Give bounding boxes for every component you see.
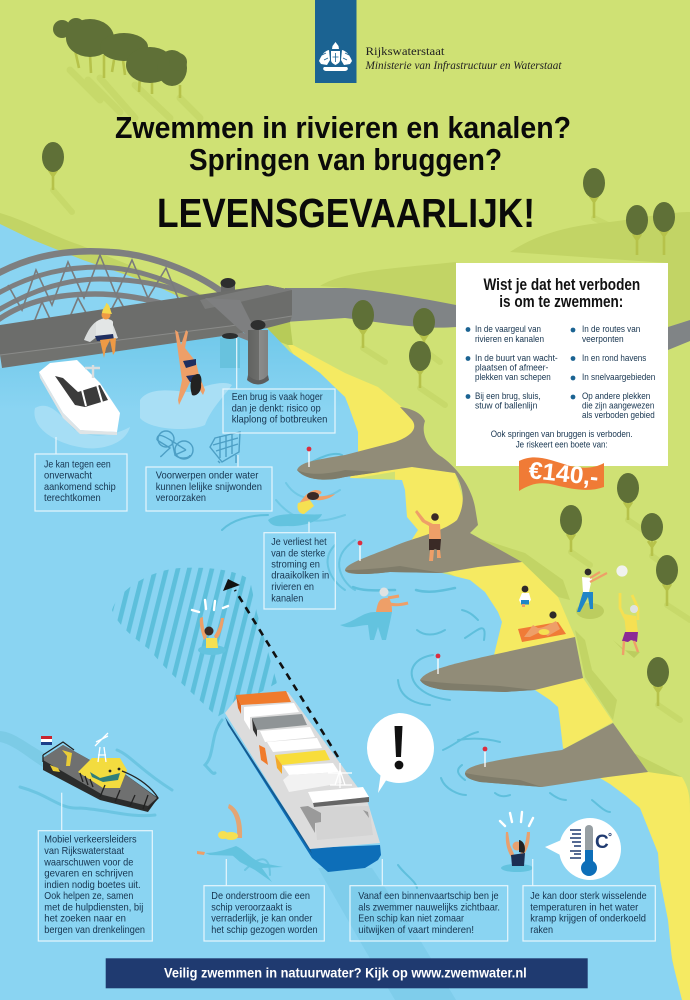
bottom banner [106, 958, 588, 988]
label: undercurrent: schip veroorzaakt is [211, 902, 292, 913]
bullet dots [466, 327, 575, 399]
right list: In en rond havens [582, 353, 647, 363]
degree: ° [608, 832, 612, 843]
deck [0, 285, 292, 355]
left list: rivieren en kanalen [475, 334, 544, 344]
cabin [78, 758, 127, 788]
label: current: stroming en [271, 559, 320, 570]
patrol boat [41, 733, 158, 812]
speedboat wake [34, 406, 130, 448]
fine flag: €140,- [527, 457, 600, 491]
label: undercurrent: De onderstroom die een [211, 891, 310, 902]
speech bubble: thermometer [545, 818, 621, 880]
right list [582, 324, 655, 420]
label: current: van de sterke [271, 548, 326, 559]
label: visibility: uitwijken of vaart minderen! [358, 925, 474, 936]
right list: veerponten [582, 334, 624, 344]
label: undercurrent [204, 859, 324, 941]
label: bridge height: klaplong of botbreuken [232, 415, 327, 426]
label: objects under water: Voorwerpen onder water [156, 471, 259, 482]
road right of panel [668, 320, 690, 350]
truss [8, 255, 190, 345]
deck front beam [0, 316, 292, 368]
water [0, 224, 682, 1000]
dashed course arrow [223, 579, 338, 757]
left list: Bij een brug, sluis, [475, 391, 541, 401]
bridge [0, 251, 292, 384]
label: bridge height: dan je denkt: risico op [232, 403, 321, 414]
left list: plaatsen of afmeer- [475, 363, 548, 373]
label: temperature: Je kan door sterk wisselende [530, 891, 647, 902]
logo: Rijkswaterstaat [315, 0, 562, 83]
mast [328, 763, 352, 788]
submerged shopping cart [210, 432, 240, 463]
tree cluster top-left [53, 18, 200, 118]
label: current: kanalen [271, 593, 303, 604]
fine note: Je riskeert een boete van: [516, 440, 608, 450]
older swimmer [340, 588, 408, 640]
label: current: draaikolken in [271, 571, 329, 582]
left list: plekken van schepen [475, 372, 551, 382]
groyne undersides [297, 470, 542, 787]
panel heading: Wist je dat het verboden [484, 275, 640, 294]
groynes [297, 407, 648, 787]
title [115, 110, 571, 236]
distressed swimmer [192, 600, 228, 655]
panel: prohibited [456, 263, 668, 466]
underwater-pulled swimmer [197, 804, 283, 882]
label: temperature: kramp krijgen of onderkoeld [530, 914, 646, 925]
thermometer [581, 825, 597, 876]
water under bridge shade [0, 328, 350, 410]
title: LEVENSGEVAARLIJK! [157, 190, 535, 236]
right list: In de routes van [582, 324, 640, 334]
right list: In snelvaargebieden [582, 372, 655, 382]
label: boat: Je kan tegen een [44, 460, 111, 470]
label: boat: onverwacht [44, 471, 92, 482]
label: bridge height [223, 338, 335, 433]
label: traffic controllers [38, 793, 152, 941]
ship wake [318, 868, 456, 1000]
radar mast [95, 733, 108, 762]
deck [43, 745, 157, 806]
panel heading [484, 275, 640, 311]
deck top road [200, 285, 292, 309]
older player [613, 593, 640, 658]
far arches [0, 251, 254, 340]
label: objects under water [146, 455, 272, 511]
left list: In de buurt van wacht- [475, 353, 558, 363]
label: visibility: Vanaf een binnenvaartschip ben je [358, 891, 499, 902]
pier back cap [221, 283, 235, 296]
label: current [264, 522, 335, 609]
title: Springen van bruggen? [189, 142, 502, 177]
blue hull [225, 720, 381, 872]
flag [41, 736, 52, 745]
right list: als verboden gebied [582, 410, 655, 420]
submerged bicycle [157, 431, 193, 459]
road on land [285, 288, 456, 328]
label: traffic controllers: waarschuwen voor de [43, 857, 134, 868]
title: Zwemmen in rivieren en kanalen? [115, 110, 571, 145]
ripples [20, 454, 610, 888]
label: objects under water: veroorzaken [156, 493, 206, 504]
label: traffic controllers: Ook helpen ze, samen [44, 891, 133, 902]
panel heading: is om te zwemmen: [499, 292, 623, 311]
bottom banner: Veilig zwemmen in natuurwater? Kijk op www.zwemwater.nl [164, 964, 527, 980]
label: undercurrent: verraderlijk, je kan onder [211, 914, 313, 925]
hull [43, 745, 158, 812]
label: bridge height: Een brug is vaak hoger [232, 392, 323, 403]
sunbather on towel [518, 611, 566, 642]
beach man [415, 510, 441, 561]
label: boat [35, 437, 127, 511]
label: visibility: Een schip kan niet zomaar [358, 914, 465, 925]
speech bubble: warning [367, 713, 434, 793]
label: traffic controllers: het zoeken naar en [44, 914, 126, 925]
person sitting on bridge [84, 303, 118, 358]
man with ball [576, 565, 628, 619]
label: objects under water: kunnen lelijke snijwonden [156, 482, 262, 493]
label: temperature [523, 859, 655, 941]
label: visibility [350, 859, 508, 941]
superstructure [308, 787, 369, 803]
left list [475, 324, 558, 411]
fine note [491, 429, 633, 450]
beaches [288, 345, 690, 1000]
right list: die zijn aangewezen [582, 401, 654, 411]
label: current: rivieren en [271, 582, 314, 593]
celsius: C [595, 832, 609, 853]
scale ticks [570, 830, 581, 858]
patrol boat wake [0, 731, 48, 770]
containers [236, 691, 291, 705]
label: visibility: als zwemmer nauwelijks zichtbaar. [358, 902, 500, 913]
label: temperature: raken [530, 925, 553, 936]
ministry name: Rijkswaterstaat [366, 44, 445, 58]
black cap [220, 278, 236, 288]
label: traffic controllers: bergen van drenkelingen [44, 925, 145, 936]
pier reflection [220, 338, 240, 368]
node [205, 298, 255, 340]
label: traffic controllers: indien nodig boetes uit. [44, 880, 141, 891]
ministry subtitle: Ministerie van Infrastructuur en Waterstaat [365, 58, 562, 72]
diving person [175, 330, 205, 405]
speedboat [39, 360, 120, 435]
cold swimmer [500, 812, 533, 872]
diver splash [140, 383, 232, 429]
label: undercurrent: het schip gezogen worden [211, 925, 318, 936]
near pier [248, 330, 268, 380]
lower cap [222, 333, 238, 339]
label: boat: terechtkomen [44, 493, 101, 504]
near cap [250, 320, 266, 330]
left list: In de vaargeul van [475, 324, 541, 334]
hatched danger zone [112, 568, 277, 716]
marker flags [307, 447, 487, 767]
label: traffic controllers: Mobiel verkeersleiders [44, 835, 137, 846]
cargo ship [225, 691, 381, 872]
label: temperature: temperaturen in het water [530, 902, 639, 913]
land shading [0, 212, 690, 803]
single trees [42, 142, 690, 720]
right list: Op andere plekken [582, 391, 650, 401]
label: traffic controllers: van Rijkswaterstaat [44, 846, 124, 857]
label: traffic controllers: gevaren en schrijven [44, 869, 133, 880]
fine note: Ook springen van bruggen is verboden. [491, 429, 633, 439]
emblem [319, 42, 352, 71]
swimmer in whirlpool [268, 490, 335, 526]
left list: stuw of ballenlijn [475, 401, 537, 411]
deck [225, 692, 380, 849]
label: traffic controllers: met de hulpdiensten, bij [44, 902, 143, 913]
label: current: Je verliest het [271, 537, 327, 548]
child on beach [519, 586, 531, 607]
label: boat: aankomend schip [44, 482, 116, 493]
